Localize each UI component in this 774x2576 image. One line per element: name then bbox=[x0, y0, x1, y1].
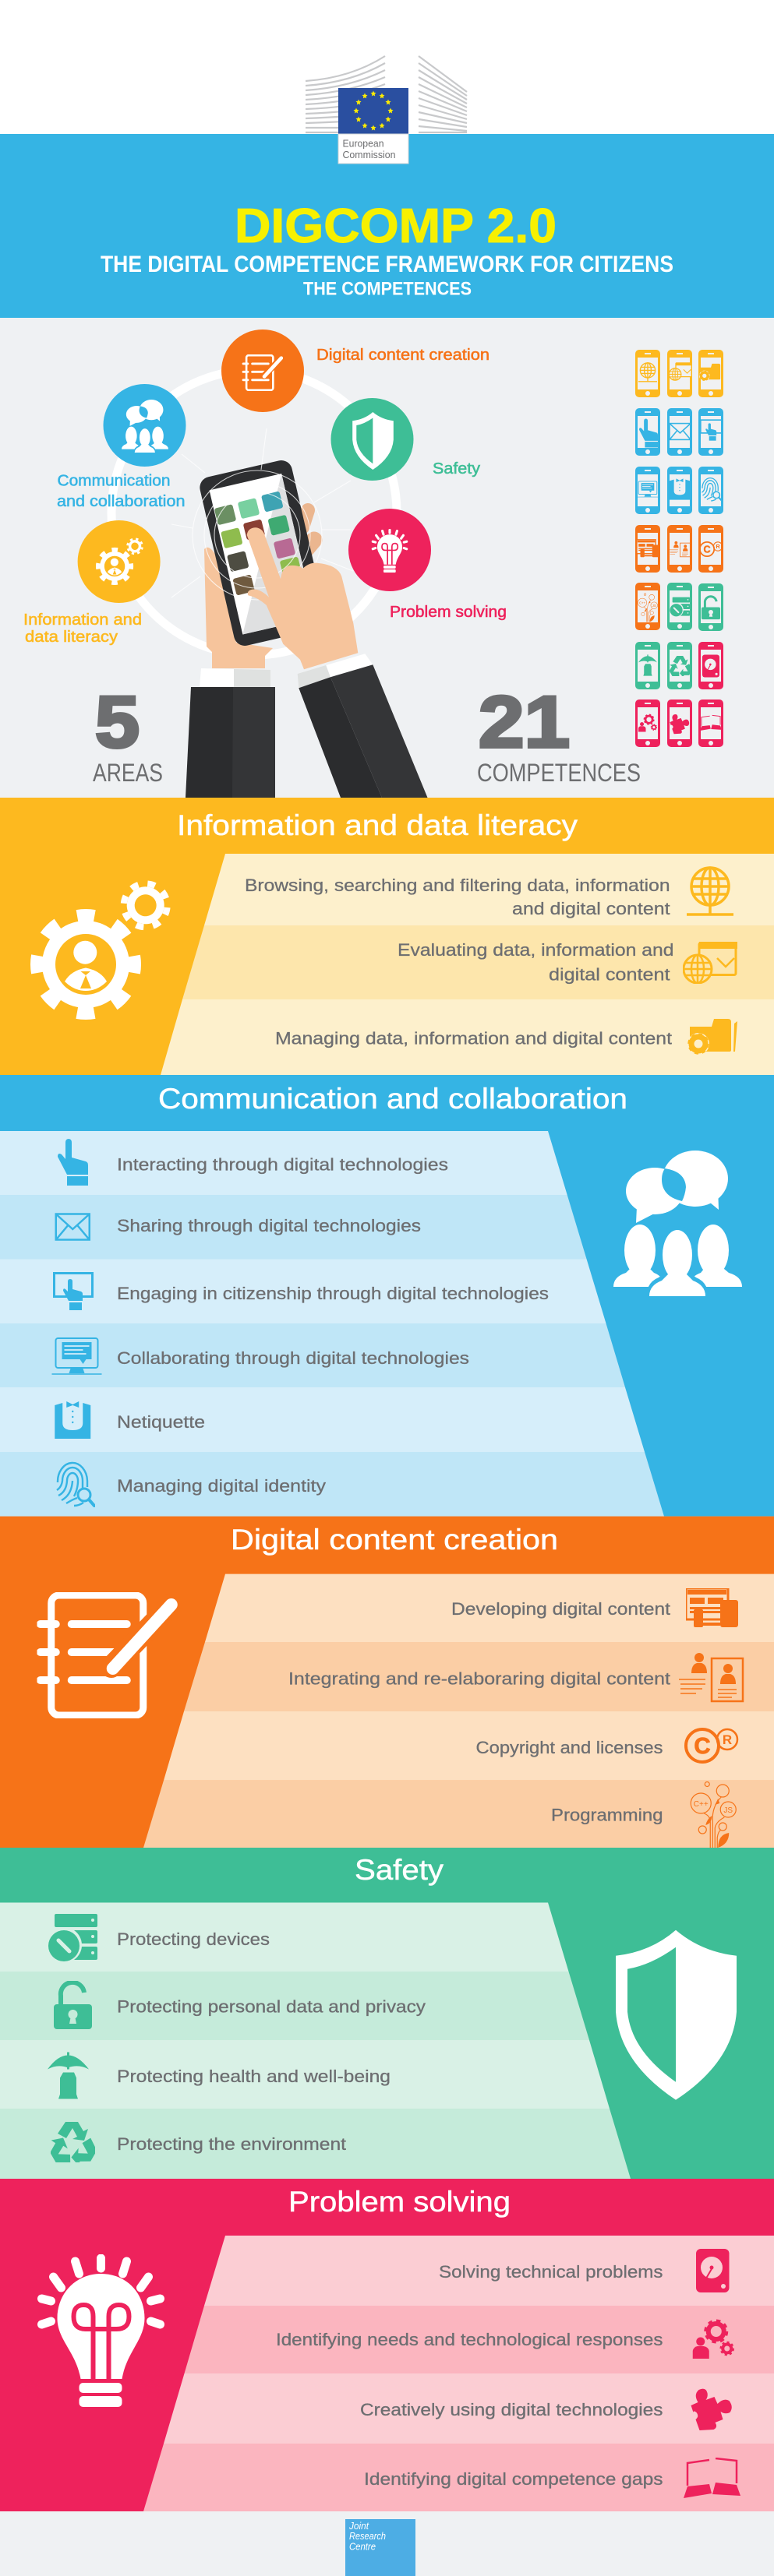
left cuff bbox=[200, 668, 234, 687]
row: environment bbox=[0, 2109, 631, 2179]
icon: shield bbox=[616, 1930, 737, 2100]
heading: Information and data literacy bbox=[177, 809, 578, 841]
row: technical problems bbox=[204, 2236, 774, 2306]
label: communication and collaboration: and collaboration bbox=[57, 493, 186, 510]
label: communication and collaboration: Communication bbox=[58, 472, 170, 489]
icon: people talking bbox=[122, 400, 168, 453]
heading: Communication and collaboration bbox=[158, 1083, 627, 1115]
row: managing identity bbox=[0, 1452, 664, 1517]
label: information and data literacy: Information and bbox=[23, 611, 142, 629]
row: collaborating bbox=[0, 1323, 625, 1387]
row: devices bbox=[0, 1902, 569, 1972]
logo wordmark: Commission bbox=[343, 149, 396, 160]
label: information and data literacy bbox=[23, 611, 142, 646]
row: developing: Developing digital content bbox=[451, 1599, 670, 1619]
row: sharing: Sharing through digital technologies bbox=[117, 1216, 421, 1235]
icon: notebook and pen bbox=[41, 1595, 173, 1715]
left hand bbox=[204, 548, 273, 668]
logo wordmark: European bbox=[343, 137, 383, 150]
logo: Joint Research Centre: Joint bbox=[348, 2520, 369, 2532]
row: competence gaps: Identifying digital competence gaps bbox=[364, 2469, 663, 2489]
stat: 21 competences bbox=[477, 681, 641, 787]
circle: information and data literacy bbox=[78, 520, 161, 603]
header: white logo strip bbox=[0, 0, 774, 134]
row: managing bbox=[161, 999, 774, 1075]
row: netiquette: Netiquette bbox=[117, 1412, 205, 1432]
label: problem solving: Problem solving bbox=[390, 604, 507, 621]
row: environment: Protecting the environment bbox=[117, 2134, 346, 2154]
ring connecting areas bbox=[111, 370, 397, 655]
sub-subtitle: THE COMPETENCES bbox=[303, 279, 472, 299]
circle: problem solving bbox=[348, 509, 431, 591]
row: collaborating: Collaborating through digital technologies bbox=[117, 1348, 469, 1368]
heading: Problem solving bbox=[288, 2186, 511, 2218]
row: browsing: Browsing, searching and filtering data, information bbox=[245, 876, 670, 895]
illustration: hands holding a smartphone bbox=[171, 428, 427, 798]
title band background bbox=[0, 134, 774, 318]
panel: digital content creation bbox=[0, 1517, 774, 1848]
label: digital content creation: Digital content creation bbox=[316, 347, 489, 364]
row: evaluating: Evaluating data, information and bbox=[398, 940, 673, 960]
stat: 5 areas: 5 bbox=[95, 681, 140, 763]
row: evaluating bbox=[182, 925, 774, 999]
row: copyright: Copyright and licenses bbox=[475, 1738, 663, 1757]
row: programming: Programming bbox=[551, 1806, 663, 1825]
panel: problem solving bbox=[0, 2179, 774, 2511]
row: personal data: Protecting personal data and privacy bbox=[117, 1997, 426, 2016]
footer background bbox=[0, 2511, 774, 2576]
panel: safety bbox=[0, 1848, 774, 2179]
row: managing identity: Managing digital identity bbox=[117, 1476, 326, 1496]
circle: safety bbox=[330, 398, 413, 481]
phone bbox=[198, 458, 328, 648]
stat: 21 competences: COMPETENCES bbox=[477, 759, 641, 787]
main title: DIGCOMP 2.0 bbox=[235, 199, 557, 253]
subtitle: THE DIGITAL COMPETENCE FRAMEWORK FOR CITIZENS bbox=[101, 252, 673, 277]
label: information and data literacy: data literacy bbox=[25, 629, 118, 646]
right sleeve bbox=[299, 677, 382, 798]
row: managing: Managing data, information and digital content bbox=[275, 1029, 672, 1048]
thin rings and spokes bbox=[171, 428, 353, 600]
right cuff bbox=[298, 665, 330, 688]
stat: 5 areas bbox=[93, 681, 163, 787]
row: needs and responses bbox=[184, 2306, 774, 2373]
icon: shield bbox=[352, 412, 394, 470]
row: browsing: and digital content bbox=[512, 899, 670, 918]
row: creatively using: Creatively using digital technologies bbox=[360, 2400, 663, 2419]
right hand bbox=[247, 527, 358, 669]
panel: information and data literacy bbox=[0, 798, 774, 1075]
row: health: Protecting health and well-being bbox=[117, 2067, 391, 2086]
left sleeve bbox=[186, 687, 233, 798]
app tiles bbox=[214, 491, 302, 596]
icon: light bulb bbox=[373, 530, 407, 573]
row: interacting bbox=[0, 1131, 567, 1195]
panel: overview bbox=[0, 318, 774, 798]
panel: communication and collaboration bbox=[0, 1075, 774, 1517]
row: sharing bbox=[0, 1195, 587, 1259]
row: engaging bbox=[0, 1259, 606, 1323]
logo: Joint Research Centre: Research bbox=[349, 2530, 386, 2542]
icon: gears with person bbox=[37, 879, 172, 1013]
row: health bbox=[0, 2040, 610, 2109]
grid: 21 competence phones bbox=[635, 350, 723, 747]
circle: communication and collaboration bbox=[103, 384, 186, 467]
row: interacting: Interacting through digital technologies bbox=[117, 1155, 448, 1175]
title block bbox=[101, 199, 673, 299]
heading: Digital content creation bbox=[231, 1524, 558, 1556]
row: technical problems: Solving technical problems bbox=[439, 2262, 663, 2282]
row: integrating bbox=[184, 1642, 774, 1711]
label: communication and collaboration bbox=[57, 472, 186, 510]
logo: European Commission bbox=[0, 56, 774, 318]
EU flag bbox=[338, 88, 408, 134]
building illustration bbox=[306, 56, 467, 132]
circle: digital content creation bbox=[221, 329, 304, 412]
row: competence gaps bbox=[143, 2444, 774, 2511]
stat: 21 competences: 21 bbox=[479, 681, 570, 763]
icon: notebook and pen bbox=[243, 355, 281, 390]
row: netiquette bbox=[0, 1387, 645, 1452]
icon: gears with person bbox=[98, 537, 144, 583]
row: programming bbox=[143, 1781, 774, 1848]
icon: light bulb bbox=[42, 2258, 161, 2407]
row: engaging: Engaging in citizenship through digital technologies bbox=[117, 1284, 549, 1303]
logo: Joint Research Centre: Centre bbox=[349, 2541, 376, 2552]
logo wordmark bbox=[338, 134, 408, 164]
heading: Safety bbox=[355, 1854, 444, 1886]
stat: 5 areas: AREAS bbox=[93, 759, 163, 787]
row: browsing bbox=[204, 854, 774, 925]
row: creatively using bbox=[164, 2373, 774, 2444]
row: personal data bbox=[0, 1972, 589, 2040]
row: integrating: Integrating and re-elaboraring digital content bbox=[288, 1669, 670, 1689]
label: safety: Safety bbox=[433, 460, 480, 477]
icon: people talking bbox=[613, 1151, 742, 1296]
row: evaluating: digital content bbox=[549, 965, 670, 985]
row: needs and responses: Identifying needs and technological responses bbox=[276, 2330, 663, 2349]
row: copyright bbox=[164, 1711, 774, 1781]
row: developing bbox=[205, 1574, 774, 1642]
logo: Joint Research Centre bbox=[345, 2519, 415, 2576]
row: devices: Protecting devices bbox=[117, 1929, 270, 1949]
